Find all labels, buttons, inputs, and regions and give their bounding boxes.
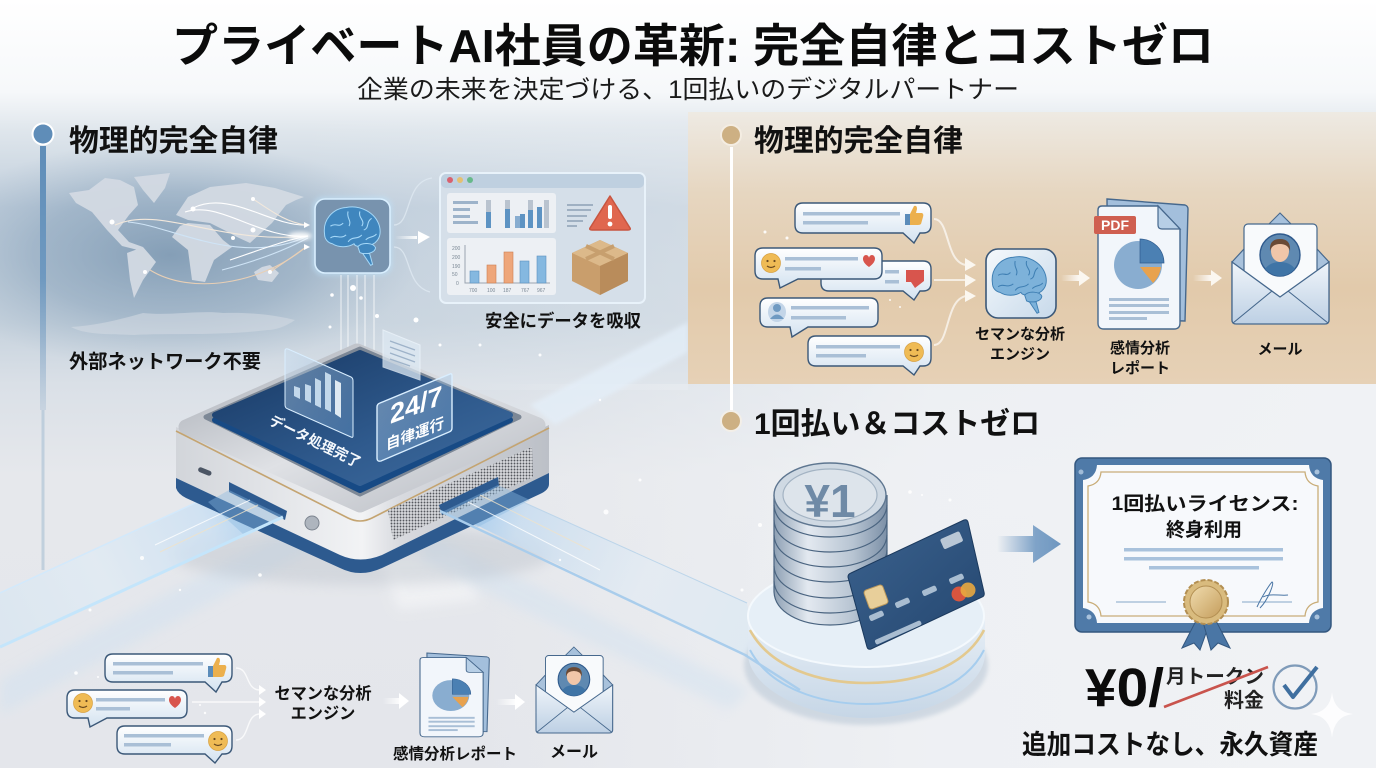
panel: right autonomy timeline xyxy=(720,124,742,432)
title: プライベートAI社員の革新: 完全自律とコストゼロ xyxy=(172,20,1214,72)
panel: dashboard window: 100 xyxy=(487,288,496,294)
arrow: report to email xyxy=(1193,270,1222,286)
arrows: brain to dashboard xyxy=(394,178,432,292)
label: data processing complete: データ処理完了 xyxy=(266,411,364,471)
sentiment flow: customer messages xyxy=(755,203,931,375)
label: lower semantic engine: セマンな分析 xyxy=(274,684,372,703)
label: safe data absorption: 安全にデータを吸収 xyxy=(485,311,641,331)
label: lower email: メール xyxy=(550,744,598,761)
label: semantic analysis engine: エンジン xyxy=(990,346,1050,363)
label: lower semantic engine: エンジン xyxy=(291,705,355,723)
panel: dashboard window: 967 xyxy=(537,288,546,294)
icon: email envelope xyxy=(1232,213,1329,324)
price: zero monthly token fee: 月トークン xyxy=(1166,666,1264,688)
arrow: lower report to email xyxy=(496,694,525,710)
glass panel: 24/7 autonomous xyxy=(377,374,452,461)
glass panel: 24/7 autonomous: 24/7 xyxy=(390,380,443,430)
certificate: lifetime license: 終身利用 xyxy=(1166,519,1242,541)
illustration: platform with coins and card: ¥1 xyxy=(804,475,856,527)
beam highlights over device slots xyxy=(0,485,760,662)
callout: no extra cost: 追加コストなし、永久資産 xyxy=(1022,730,1318,760)
panel: dashboard window: 0 xyxy=(456,281,459,287)
icon: check mark xyxy=(1274,666,1353,738)
price: zero monthly token fee: 料金 xyxy=(1224,689,1264,712)
data streams: brain to device xyxy=(328,275,442,395)
icon: PDF report: PDF xyxy=(1101,217,1129,233)
label: sentiment report: レポート xyxy=(1110,360,1170,377)
panel: dashboard window: 50 xyxy=(452,272,458,278)
arrow: engine to report xyxy=(1061,270,1090,286)
panel: right tan background xyxy=(688,112,1376,384)
panel: dashboard window: 190 xyxy=(452,264,461,270)
heading: right section: 物理的完全自律 xyxy=(754,125,963,158)
heading: left section: 物理的完全自律 xyxy=(69,125,278,158)
lower flow: customer messages xyxy=(67,654,232,763)
chart: world map with data flows xyxy=(69,173,312,335)
icon: lower email xyxy=(536,647,613,733)
arrows: messages to analysis engine xyxy=(934,219,976,345)
icon: credit card xyxy=(848,520,984,649)
icon: PDF report xyxy=(1094,199,1188,329)
certificate: lifetime license: 1回払いライセンス: xyxy=(1112,493,1298,515)
label: sentiment report: 感情分析 xyxy=(1110,339,1170,357)
subtitle: 企業の未来を決定づける、1回払いのデジタルパートナー xyxy=(357,76,1019,104)
arrow: lower engine to report xyxy=(383,693,409,709)
glass panel: 24/7 autonomous: 自律運行 xyxy=(386,413,444,454)
panel: left autonomy timeline xyxy=(32,122,54,570)
device: mini server xyxy=(176,349,549,573)
panel: dashboard window: 200 xyxy=(452,255,461,261)
arrow: payment to license xyxy=(997,525,1061,563)
label: semantic analysis engine: セマンな分析 xyxy=(975,325,1065,343)
icon: semantic analysis engine xyxy=(986,249,1056,318)
arrows: lower messages to engine text xyxy=(192,668,266,740)
icon: lower report xyxy=(420,653,489,737)
illustration: platform with coins and card xyxy=(744,463,988,725)
label: email: メール xyxy=(1257,341,1303,358)
panel: dashboard window: 187 xyxy=(503,288,512,294)
beam: left data stream xyxy=(0,487,283,647)
label: no external network: 外部ネットワーク不要 xyxy=(69,351,261,373)
label: lower sentiment report: 感情分析レポート xyxy=(393,744,517,763)
panel: dashboard window xyxy=(440,173,645,303)
panel: dashboard window: 700 xyxy=(469,288,478,294)
certificate: lifetime license xyxy=(1075,458,1331,650)
icon: holographic brain xyxy=(312,196,393,276)
panel: dashboard window: 767 xyxy=(521,288,530,294)
price: zero monthly token fee: ¥0/ xyxy=(1085,658,1164,718)
glass panel: bar chart xyxy=(285,349,353,437)
sparkles xyxy=(74,230,951,714)
glass panel: document xyxy=(383,330,420,380)
heading: one-time payment: 1回払い＆コストゼロ xyxy=(754,408,1040,441)
panel: dashboard window: 200 xyxy=(452,246,461,252)
beam: right data stream xyxy=(439,493,760,662)
price: zero monthly token fee xyxy=(1085,658,1268,718)
